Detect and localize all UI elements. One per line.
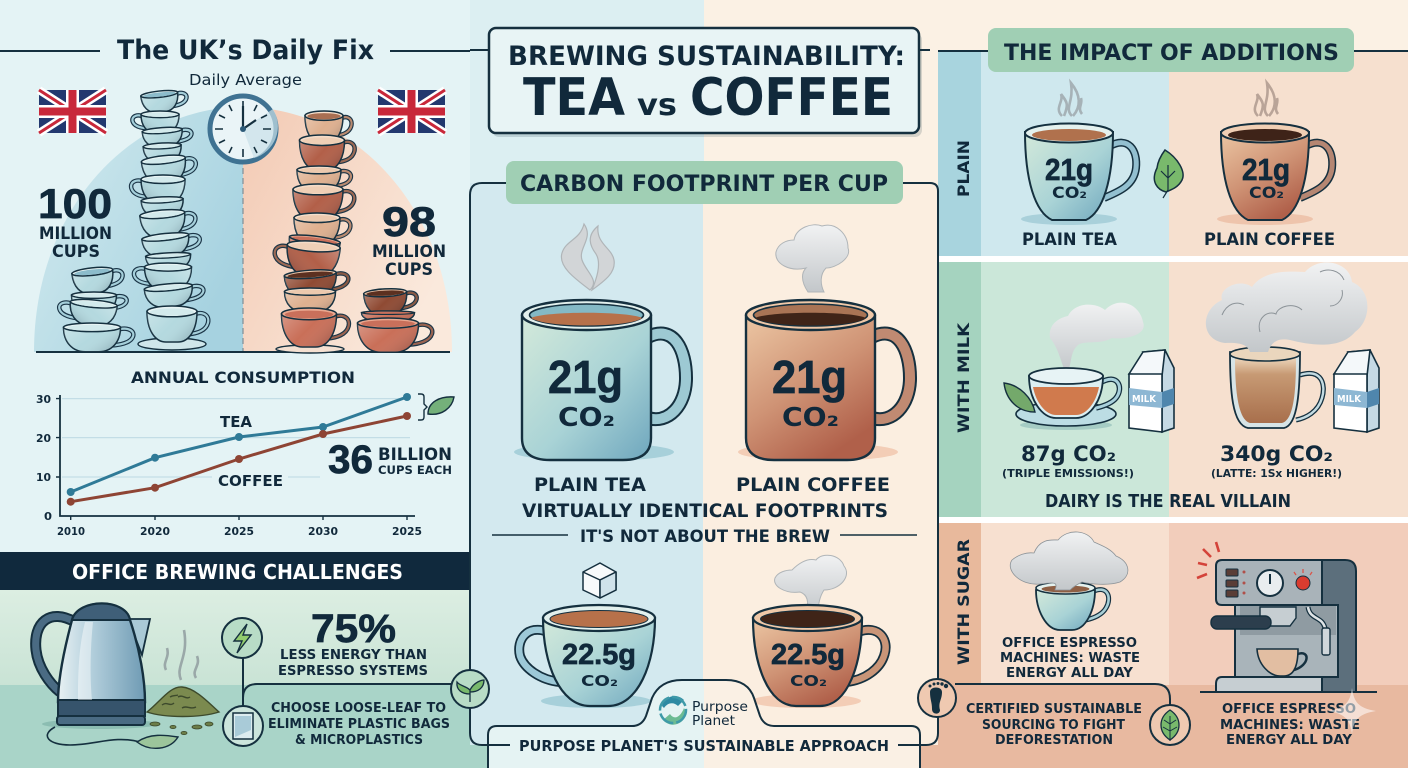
heading: carbon footprint per cup: CARBON FOOTPRINT PER CUP bbox=[520, 172, 888, 197]
small coffee cup stack bbox=[358, 287, 432, 352]
line chart: 2010 bbox=[57, 526, 85, 538]
icon: right UK flag bbox=[378, 90, 445, 133]
title line 2 bbox=[523, 68, 893, 128]
stat: 36 billion cups each bbox=[328, 438, 452, 482]
row: with milk bbox=[938, 256, 1408, 517]
stat: 75 percent less energy: LESS ENERGY THAN bbox=[280, 647, 427, 663]
panel: annual consumption chart bbox=[36, 368, 454, 538]
stat: 75 percent less energy: ESPRESSO SYSTEMS bbox=[278, 663, 428, 679]
icon: lightning bolt bbox=[222, 618, 262, 658]
emissions cloud bbox=[1010, 532, 1128, 590]
text: office espresso machines right: MACHINES: WASTE bbox=[1220, 717, 1360, 733]
icon: cord leaf bbox=[137, 735, 178, 748]
label: plain coffee: PLAIN COFFEE bbox=[736, 474, 890, 496]
text: certified sustainable sourcing: DEFORESTATION bbox=[995, 732, 1113, 748]
line chart: 30 bbox=[36, 393, 51, 406]
icon: leaf sprout circle bbox=[451, 670, 489, 708]
text: office espresso machines left bbox=[1000, 635, 1140, 681]
icon: left UK flag bbox=[39, 90, 106, 133]
icon: sugar cube bbox=[583, 563, 616, 598]
text: virtually identical footprints: VIRTUALLY IDENTICAL FOOTPRINTS bbox=[522, 500, 888, 522]
line chart: 2025 bbox=[224, 526, 254, 538]
coffee half dome bbox=[243, 107, 452, 352]
banner heading: OFFICE BREWING CHALLENGES bbox=[72, 560, 403, 584]
icon: steam bbox=[165, 630, 198, 680]
text: choose loose-leaf: & MICROPLASTICS bbox=[295, 732, 423, 748]
connector lines bbox=[243, 658, 452, 706]
tea with milk illustration bbox=[1004, 303, 1144, 430]
text: office espresso machines left: MACHINES: WASTE bbox=[1000, 650, 1140, 666]
line chart: 2020 bbox=[140, 526, 170, 538]
stat: 75 percent less energy bbox=[278, 607, 428, 679]
label: plain coffee: PLAIN COFFEE bbox=[1204, 230, 1335, 249]
icon: small coffee cloud bbox=[775, 555, 847, 614]
big tea mug bbox=[514, 300, 686, 461]
callout: dairy is the real villain: DAIRY IS THE REAL VILLAIN bbox=[1045, 492, 1291, 512]
text: certified sustainable sourcing bbox=[966, 701, 1142, 748]
stat: 100 million cups: MILLION bbox=[39, 224, 112, 243]
stat: 340g CO2 bbox=[1211, 442, 1342, 480]
line chart: 20 bbox=[36, 432, 51, 445]
panel: the UK's daily fix bbox=[0, 35, 470, 353]
connector line bbox=[955, 684, 1170, 706]
tea with sugar cup: CO₂ bbox=[581, 672, 618, 690]
sugar cup with cloud bbox=[1010, 532, 1128, 630]
bottom corners bbox=[470, 745, 938, 768]
logo: purpose planet: Planet bbox=[692, 714, 735, 729]
tea half dome bbox=[34, 107, 243, 352]
stat: 98 million cups: 98 bbox=[382, 198, 436, 245]
heading: carbon footprint per cup bbox=[506, 161, 903, 204]
icon: milk carton latte: MILK bbox=[1337, 394, 1362, 405]
label: plain tea: PLAIN TEA bbox=[1022, 230, 1117, 249]
plain coffee cup: 21g bbox=[1242, 152, 1290, 187]
stat: 87g CO2 bbox=[1002, 442, 1134, 480]
text: choose loose-leaf: CHOOSE LOOSE-LEAF TO bbox=[271, 700, 446, 716]
heading: the impact of additions: THE IMPACT OF ADDITIONS bbox=[1004, 41, 1339, 66]
icon: kettle bbox=[36, 604, 158, 745]
line chart bbox=[36, 393, 422, 538]
plain tea cup: CO₂ bbox=[1052, 183, 1087, 202]
divider and ground line bbox=[36, 168, 450, 352]
line chart: 10 bbox=[36, 471, 51, 484]
icon: coffee cloud bbox=[776, 225, 849, 292]
stat: 100 million cups: 100 bbox=[38, 180, 112, 227]
stat: 87g CO2: (TRIPLE EMISSIONS!) bbox=[1002, 467, 1134, 480]
stat: 340g CO2: 340g CO₂ bbox=[1220, 442, 1333, 466]
latte illustration bbox=[1206, 262, 1367, 428]
title line 2: TEA bbox=[523, 68, 625, 128]
plain tea cup bbox=[1021, 83, 1136, 225]
purpose planet sustainable approach box bbox=[488, 680, 920, 768]
emissions cloud bbox=[1206, 262, 1367, 352]
emissions cloud bbox=[1050, 303, 1144, 372]
plain coffee cup bbox=[1217, 83, 1332, 225]
icon: loose-leaf tea pile bbox=[147, 687, 219, 735]
icon: leaf bbox=[1154, 150, 1183, 198]
big tea mug: 21g bbox=[548, 351, 623, 403]
title line 2: COFFEE bbox=[690, 68, 893, 128]
icon: clock bbox=[210, 96, 278, 162]
coffee half background bbox=[703, 183, 938, 745]
stat: 36 billion cups each: BILLION bbox=[378, 445, 452, 464]
plain tea cup: 21g bbox=[1045, 152, 1093, 187]
icon: sustainable leaf bbox=[1150, 705, 1190, 745]
subheading: daily average: Daily Average bbox=[189, 71, 302, 89]
tea with sugar cup bbox=[519, 605, 655, 708]
icon: milk carton tea: MILK bbox=[1132, 394, 1157, 405]
logo: purpose planet bbox=[660, 696, 748, 729]
plain coffee cup: CO₂ bbox=[1249, 183, 1284, 202]
stat: 98 million cups: MILLION bbox=[372, 242, 446, 261]
icon: tea bag bbox=[223, 706, 263, 746]
small tea cup stack bbox=[58, 265, 133, 352]
panel: impact of additions bbox=[938, 28, 1408, 768]
icon: milk carton latte bbox=[1334, 350, 1379, 432]
heading: the UK's daily fix: The UK’s Daily Fix bbox=[117, 35, 374, 66]
line chart: 0 bbox=[44, 510, 52, 523]
icon: bracket and leaf bbox=[418, 394, 454, 420]
line chart: 2025 bbox=[392, 526, 422, 538]
panel border bbox=[470, 183, 938, 745]
stat: 87g CO2: 87g CO₂ bbox=[1021, 442, 1116, 466]
row: plain: PLAIN bbox=[954, 140, 973, 197]
text: choose loose-leaf bbox=[268, 700, 450, 748]
coffee series bbox=[67, 412, 411, 506]
stat: 98 million cups bbox=[372, 198, 446, 279]
text: office espresso machines left: ENERGY ALL DAY bbox=[1006, 665, 1133, 681]
coffee with sugar cup: CO₂ bbox=[790, 672, 827, 690]
text: office espresso machines right: ENERGY ALL DAY bbox=[1226, 732, 1352, 748]
text: office espresso machines right: OFFICE ESPRESSO bbox=[1222, 701, 1356, 717]
label: plain tea: PLAIN TEA bbox=[534, 474, 646, 496]
tea series bbox=[67, 393, 411, 496]
icon: espresso machine bbox=[1197, 542, 1377, 692]
panel: carbon footprint per cup bbox=[451, 161, 956, 768]
stat: 100 million cups bbox=[38, 180, 112, 261]
heading: the impact of additions bbox=[938, 28, 1408, 72]
row: with sugar bbox=[938, 517, 1408, 768]
panel: office brewing challenges bbox=[0, 552, 470, 768]
tall coffee cup stack bbox=[273, 111, 355, 353]
line chart: COFFEE bbox=[218, 472, 283, 490]
stat: 340g CO2: (LATTE: 1Sx HIGHER!) bbox=[1211, 467, 1342, 480]
stat: 36 billion cups each: CUPS EACH bbox=[378, 463, 452, 477]
icon: milk carton tea bbox=[1129, 350, 1174, 432]
row: with sugar: WITH SUGAR bbox=[954, 539, 973, 665]
line chart: 2030 bbox=[308, 526, 338, 538]
text: office espresso machines right bbox=[1220, 701, 1360, 748]
big coffee mug bbox=[738, 300, 910, 461]
big coffee mug: 21g bbox=[772, 351, 847, 403]
logo: purpose planet: Purpose bbox=[692, 700, 748, 715]
tea half background bbox=[470, 183, 703, 745]
icon: footprint circle bbox=[918, 679, 956, 717]
text: office espresso machines left: OFFICE ESPRESSO bbox=[1002, 635, 1137, 651]
coffee with sugar cup bbox=[751, 605, 886, 708]
text: certified sustainable sourcing: SOURCING TO FIGHT bbox=[982, 717, 1126, 733]
text: certified sustainable sourcing: CERTIFIED SUSTAINABLE bbox=[966, 701, 1142, 717]
tea with sugar cup: 22.5g bbox=[562, 639, 636, 671]
title line 2: vs bbox=[637, 88, 677, 123]
title line 1: BREWING SUSTAINABILITY: bbox=[508, 41, 905, 72]
decorative sparkle marker bbox=[1328, 688, 1376, 734]
coffee with sugar cup: 22.5g bbox=[771, 639, 845, 671]
big tea mug: CO₂ bbox=[558, 403, 615, 433]
text: it's not about the brew: IT'S NOT ABOUT THE BREW bbox=[580, 527, 830, 546]
stat: 98 million cups: CUPS bbox=[385, 260, 433, 279]
stat: 75 percent less energy: 75% bbox=[311, 607, 396, 651]
title box bbox=[470, 28, 930, 137]
chart title: ANNUAL CONSUMPTION bbox=[131, 368, 355, 387]
big coffee mug: CO₂ bbox=[782, 403, 839, 433]
line chart: TEA bbox=[220, 413, 252, 431]
row: with milk: WITH MILK bbox=[954, 322, 973, 433]
stat: 100 million cups: CUPS bbox=[52, 242, 100, 261]
row: plain bbox=[938, 52, 1408, 256]
banner heading bbox=[0, 552, 470, 590]
text: choose loose-leaf: ELIMINATE PLASTIC BAGS bbox=[268, 716, 450, 732]
icon: tea steam bbox=[561, 224, 614, 290]
purpose planet sustainable approach box: PURPOSE PLANET'S SUSTAINABLE APPROACH bbox=[519, 737, 889, 755]
stat: 36 billion cups each: 36 bbox=[328, 438, 373, 482]
tall tea cup stack bbox=[131, 88, 208, 350]
